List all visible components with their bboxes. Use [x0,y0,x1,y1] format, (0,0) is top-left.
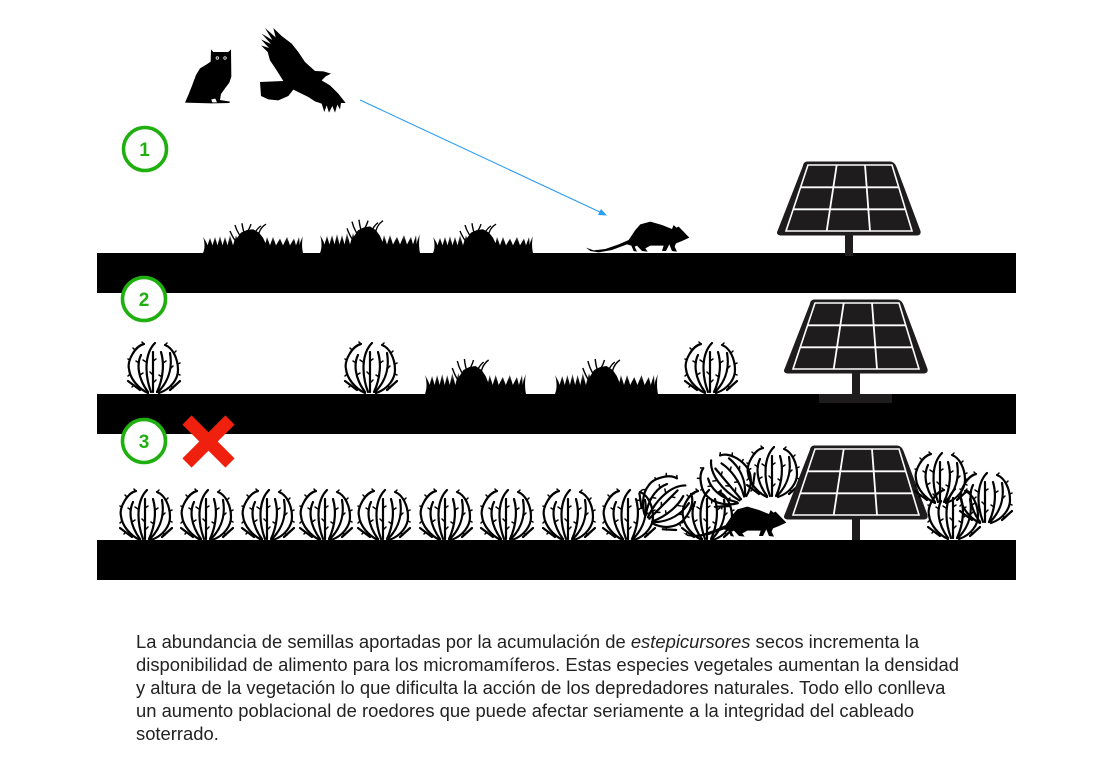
ground bar: scene 2 [97,394,1016,434]
scene 1 rodent [586,222,689,252]
caption text: y altura de la vegetación lo que dificulta la acción de los depredadores naturales. Todo ello conlleva [136,677,945,698]
number badge 3 [122,420,166,462]
scene 2 tumbleweeds [128,342,737,393]
number badge 2: 2 [139,290,149,311]
scene 2 solar panel [784,300,927,403]
scene 3 tumbleweed pile right [915,452,1012,539]
caption text: un aumento poblacional de roedores que puede afectar seriamente a la integridad del cableado [136,700,914,721]
scene 3 solar panel [784,446,927,540]
ground bar: scene 1 [97,253,1016,293]
scene 1 grass [203,220,533,253]
number badge 1: 1 [139,140,150,161]
caption text [136,631,959,744]
caption text: soterrado. [136,723,219,744]
scene 2 grass [425,359,658,394]
number badge 1 [124,128,166,170]
icon: eagle [260,28,346,113]
ground bar: scene 3 [97,540,1016,580]
caption text: La abundancia de semillas aportadas por la acumulación de estepicursores secos incrementa la [136,631,919,652]
scene 3 tumbleweed row [120,443,799,540]
scene 1 solar panel [778,162,920,256]
icon: owl [185,49,231,103]
caption text: disponibilidad de alimento para los micromamíferos. Estas especies vegetales aumentan la densidad [136,654,959,675]
icon: red cross [187,420,230,463]
number badge 3: 3 [139,432,149,453]
arrow: predation [360,100,607,216]
number badge 2 [122,278,166,320]
scene 3 rodent [683,507,786,537]
